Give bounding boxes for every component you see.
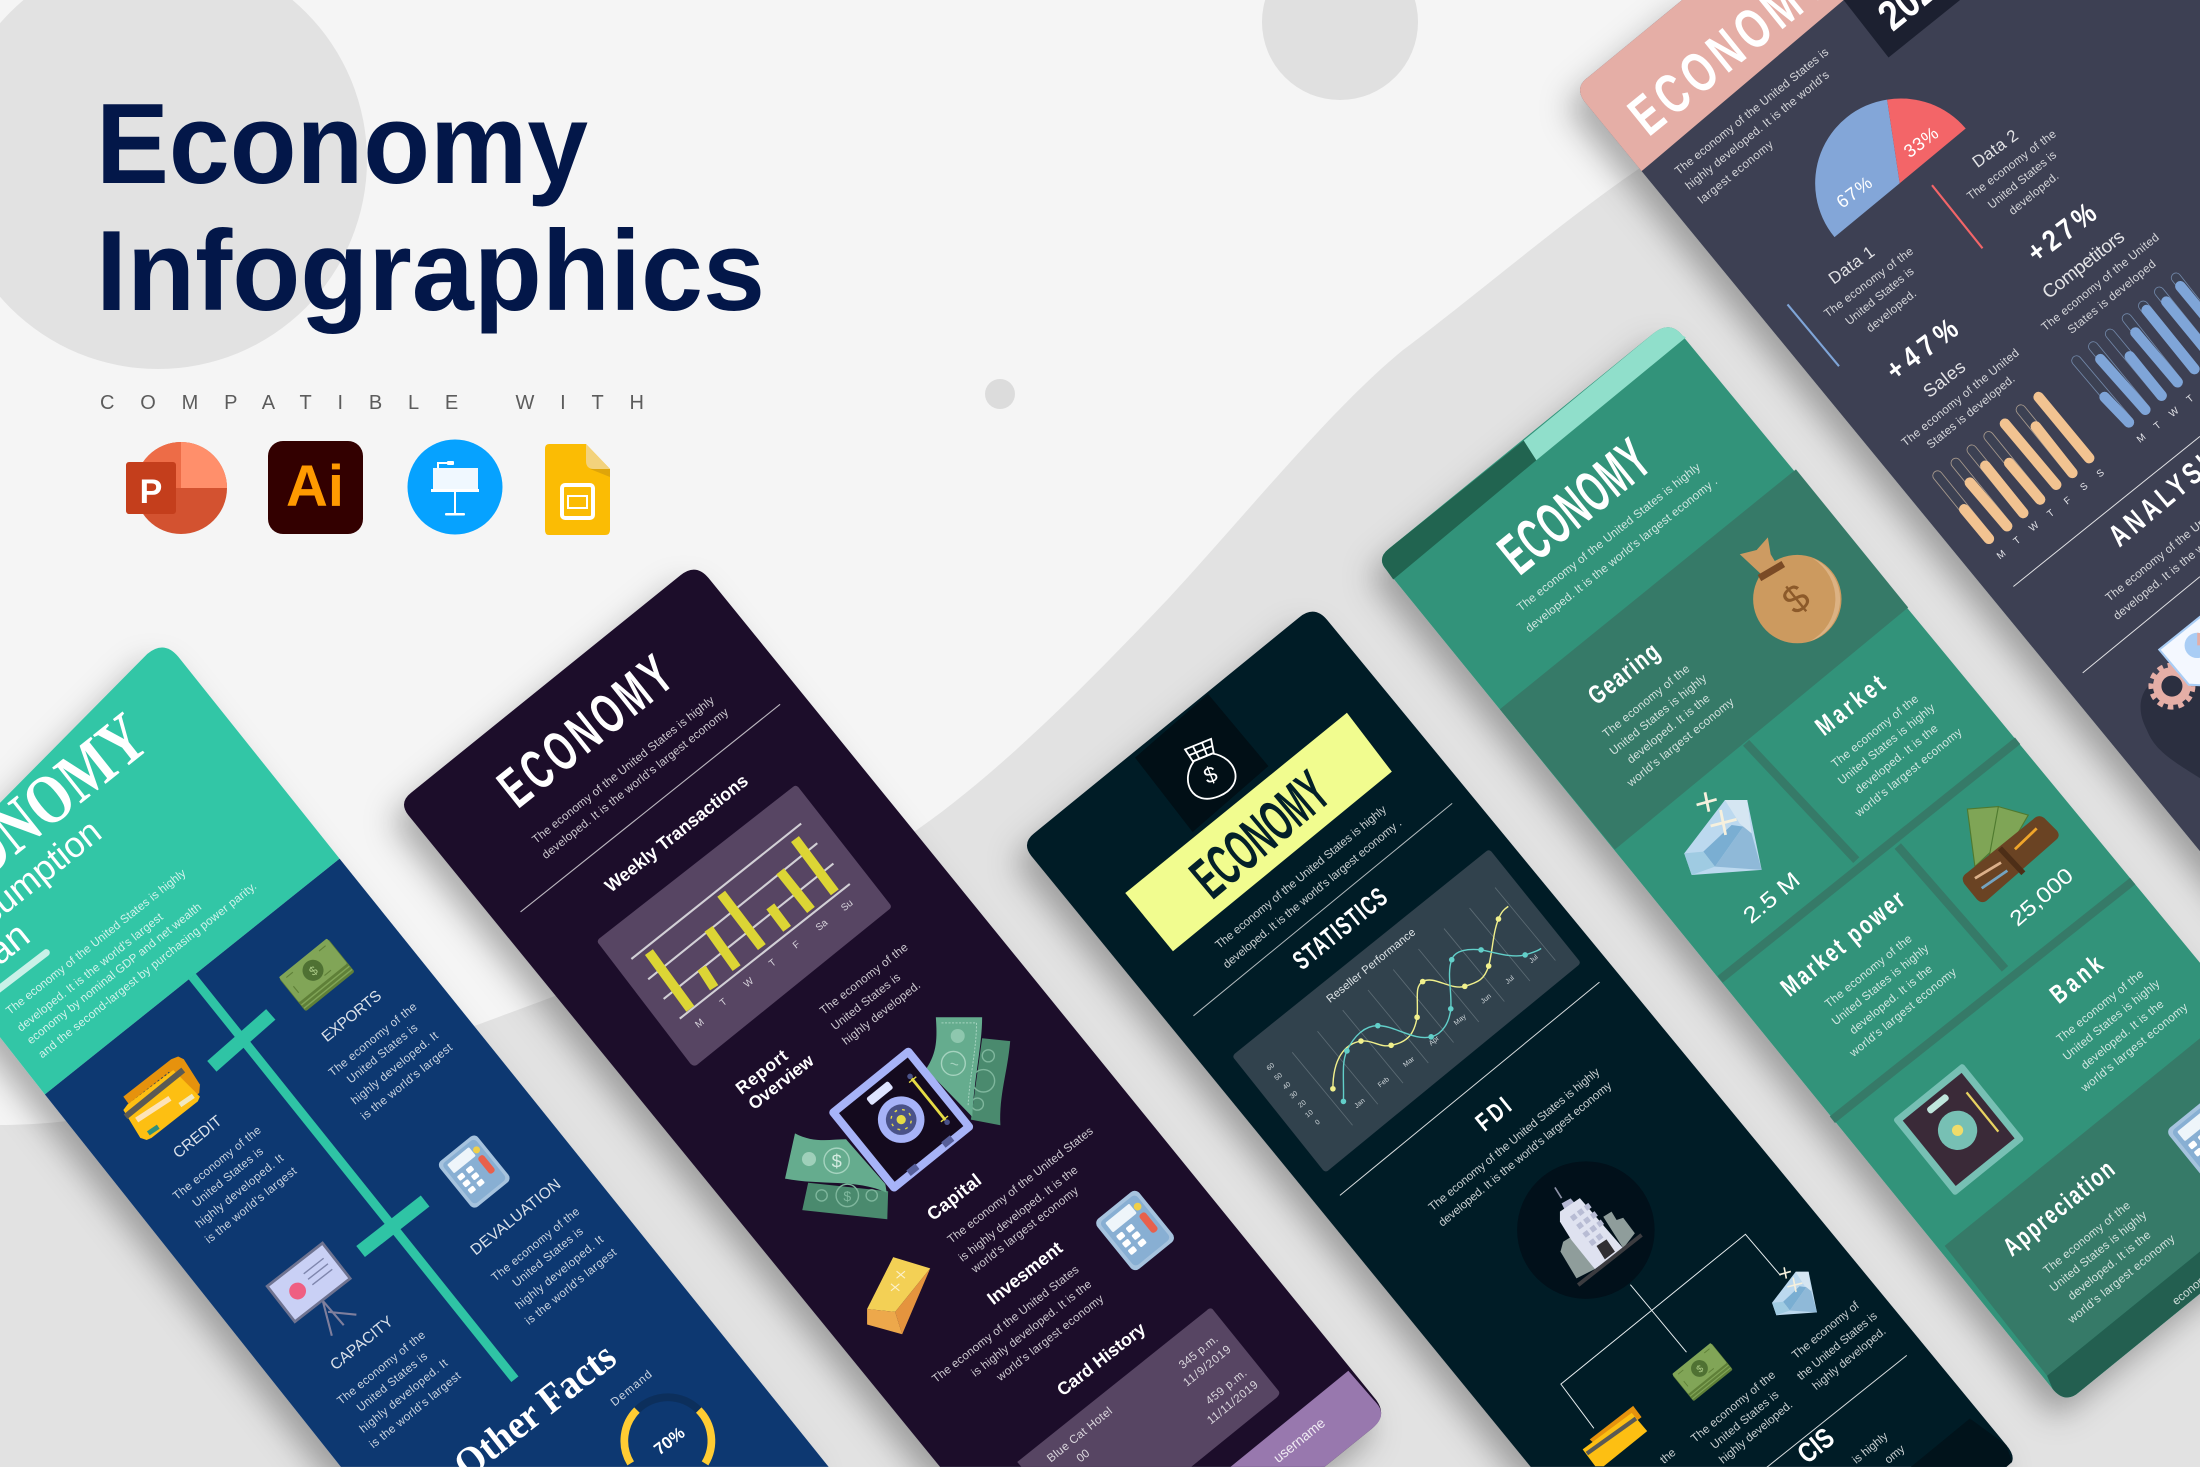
panel: card history table: Blue Cat Hotel — [1045, 1405, 1115, 1465]
analysis text clipped: omy — [1882, 1442, 1908, 1466]
intro text: The economy of the United States is highly — [1515, 461, 1703, 614]
icon: building — [1517, 1161, 1655, 1299]
heading: ECONOMY — [1178, 758, 1342, 910]
item: capacity — [327, 1313, 464, 1451]
report overview text: The economy of the — [817, 941, 911, 1017]
heading: FDI: FDI — [1470, 1092, 1517, 1137]
item: bank: world's largest economy — [2078, 1001, 2191, 1095]
icon: bank notes right: ~ — [948, 1056, 960, 1074]
card body — [1382, 327, 2200, 1398]
icon: money bag — [1740, 537, 1842, 643]
item: capital — [923, 1124, 1096, 1276]
item: appreciation: Appreciation — [1998, 1155, 2120, 1262]
stat: competitors: The economy of the United — [2039, 231, 2162, 334]
bar chart: orange pill bars: T — [2012, 535, 2023, 547]
donut chart: 70 percent: 70% — [650, 1423, 688, 1459]
item: exports: United States is — [344, 1021, 420, 1086]
item: market power: developed. It is the — [1847, 963, 1935, 1037]
line chart: reseller performance: Jun — [1480, 993, 1493, 1005]
item: data 1: Data 1 — [1825, 242, 1878, 288]
card footer — [1230, 1371, 1381, 1467]
item: bank — [2044, 949, 2191, 1095]
item: bank: United States is highly — [2060, 977, 2163, 1063]
bar chart: weekly transactions: Su — [839, 898, 855, 914]
bar chart: orange pill bars: W — [2027, 519, 2042, 534]
panel: dark statistics card — [1027, 612, 2013, 1467]
icon: gold bar — [867, 1257, 930, 1334]
intro text: highly developed. It is the world's — [1683, 68, 1832, 192]
icon: wallet — [1963, 807, 2059, 902]
item: devaluation — [467, 1176, 620, 1328]
item: credit: CREDIT — [170, 1112, 226, 1162]
item: capital: The economy of the United States — [945, 1124, 1096, 1246]
section: appreciation background — [1945, 1002, 2200, 1376]
pie chart: 33% — [1899, 122, 1942, 162]
line chart: reseller performance: Jul — [1528, 954, 1540, 965]
stat: sales: +47% — [1879, 311, 1964, 387]
item: gearing: world's largest economy — [1624, 695, 1737, 790]
bar chart: blue pill bars — [2077, 278, 2200, 445]
line chart: reseller performance: Mar — [1402, 1055, 1417, 1069]
icon: Keynote — [408, 440, 502, 534]
intro text: and the second-largest by purchasing power parity. — [36, 880, 259, 1061]
intro text: The economy of the United States is highly — [4, 867, 189, 1017]
card footer — [2047, 1215, 2200, 1398]
report overview text: United States is — [829, 971, 903, 1033]
item: data 1: The economy of the — [1822, 245, 1916, 320]
item: appreciation: world's largest economy — [2065, 1232, 2178, 1327]
decorative circle: top — [1262, 0, 1418, 100]
bar chart: weekly transactions: F — [791, 939, 803, 951]
icon: money bag outline — [1176, 735, 1241, 805]
footer username: username — [1270, 1414, 1328, 1466]
item: exports: The economy of the — [326, 1000, 419, 1079]
icon: diamond — [1684, 792, 1762, 875]
item: appreciation — [1998, 1155, 2178, 1327]
item: exports: highly developed. It — [349, 1029, 441, 1107]
icon: credit card — [1583, 1406, 1647, 1466]
report overview heading: Report — [732, 1045, 792, 1098]
pie chart: 67% — [1832, 172, 1876, 212]
intro text: The economy of the United States is highly — [1213, 803, 1389, 951]
compatible software icons — [126, 440, 610, 535]
item: capacity: is the world's largest — [367, 1369, 464, 1451]
panel: card history table: 11/11/2019 — [1205, 1378, 1261, 1427]
intro text: The economy of the United States is — [1672, 46, 1831, 178]
title banner — [1125, 713, 1392, 951]
icon: bank notes left: $ — [832, 1150, 842, 1171]
intro text: developed. It is the world's largest economy . — [1221, 817, 1404, 971]
item: devaluation: highly developed. It — [513, 1233, 607, 1312]
org tree lines — [1561, 1234, 1780, 1428]
stat: competitors — [2020, 196, 2162, 337]
item: gearing — [1582, 636, 1737, 790]
label: demand: Demand — [608, 1368, 655, 1409]
bar chart: weekly transactions: W — [742, 975, 757, 990]
stat: 25,000: 25,000 — [2004, 863, 2078, 931]
line chart: reseller performance: Feb — [1377, 1076, 1391, 1089]
decorative circle: large — [0, 0, 367, 369]
item: exports — [319, 987, 456, 1123]
panel: slate analysis card — [1580, 0, 2200, 940]
item: gearing: developed. It is the — [1625, 692, 1713, 766]
item: market — [1809, 668, 1965, 820]
bar chart: weekly transactions: T — [718, 996, 730, 1009]
item: exports: EXPORTS — [319, 987, 385, 1046]
analysis text clipped: is highly — [1850, 1430, 1891, 1466]
line chart: reseller performance: Jan — [1353, 1097, 1367, 1110]
item: market: United States is highly — [1836, 701, 1938, 787]
icon: PowerPoint — [126, 442, 227, 534]
icon: PowerPoint: P — [140, 473, 162, 511]
card body — [404, 570, 1381, 1467]
stat: competitors: +27% — [2020, 196, 2102, 269]
item: bank: Bank — [2044, 949, 2108, 1009]
item: market power: The economy of the — [1822, 932, 1915, 1010]
item: market power: United States is highly — [1829, 942, 1931, 1028]
bar chart: orange pill bars: S — [2095, 467, 2107, 480]
underline — [0, 953, 46, 999]
panel: card history table — [1017, 1308, 1279, 1467]
timeline — [192, 977, 515, 1379]
item: data 2: developed. — [2006, 170, 2061, 218]
icon: safe — [828, 1046, 975, 1193]
item: market: Market — [1809, 668, 1891, 741]
item: capacity: The economy of the — [335, 1329, 428, 1407]
title: Economy — [96, 81, 588, 208]
bar chart: weekly transactions — [598, 786, 891, 1066]
icon: money — [1672, 1343, 1733, 1401]
bar chart: weekly transactions: T — [767, 957, 779, 970]
line chart: reseller performance: 20 — [1297, 1099, 1308, 1110]
item text: diamond: highly developed. — [1810, 1325, 1889, 1393]
item: investment: world's largest economy — [993, 1292, 1106, 1384]
bar chart: blue pill bars: T — [2152, 420, 2164, 432]
panel: card history table: 11/9/2019 — [1181, 1343, 1234, 1389]
stat: competitors: States is developed — [2065, 258, 2158, 337]
item: devaluation: is the world's largest — [523, 1245, 620, 1328]
pie chart — [1815, 98, 1966, 237]
icon: calculator — [437, 1133, 512, 1210]
item text: diamond — [1790, 1299, 1889, 1393]
item: market: The economy of the — [1829, 692, 1921, 771]
heading: ECONOMY — [486, 643, 684, 819]
stat: sales — [1879, 311, 2022, 451]
panel: card history table: 00 — [1074, 1446, 1093, 1465]
icon: credit card — [123, 1057, 200, 1140]
item: capacity: CAPACITY — [327, 1313, 397, 1374]
top band dark — [1382, 441, 1536, 579]
bar chart: blue pill bars: W — [2167, 405, 2182, 420]
item: capacity: highly developed. It — [357, 1356, 451, 1436]
FDI text: developed. It is the world's largest economy — [1436, 1079, 1614, 1229]
line chart: reseller performance: 60 — [1266, 1062, 1276, 1072]
item: data 2: The economy of the — [1965, 127, 2059, 203]
item: bank: The economy of the — [2054, 967, 2146, 1046]
item: bank: developed. It is the — [2079, 998, 2166, 1072]
stat: sales: Sales — [1919, 356, 1969, 402]
title: Infographics — [96, 208, 765, 335]
icon: Illustrator: Ai — [286, 454, 344, 519]
card footer strip — [1911, 1418, 2012, 1467]
item: investment: is highly developed. It is the — [969, 1278, 1094, 1379]
line chart: reseller performance: 50 — [1273, 1072, 1284, 1082]
icon: bank notes left: $ — [843, 1188, 851, 1204]
line chart: reseller performance — [1233, 850, 1580, 1172]
bar chart: orange pill bars — [1938, 397, 2107, 562]
item: gearing: United States is highly — [1607, 672, 1709, 758]
item: data 2: Data 2 — [1969, 126, 2022, 172]
card shell — [0, 647, 829, 1467]
FDI text: The economy of the United States is highly — [1426, 1065, 1602, 1214]
stat: competitors: Competitors — [2039, 226, 2129, 303]
line chart: reseller performance: 40 — [1282, 1081, 1292, 1091]
item: investment: Invesment — [983, 1237, 1066, 1309]
item: gearing: Gearing — [1582, 636, 1665, 710]
item: data 1: developed. — [1864, 287, 1919, 335]
icon: calculator — [1094, 1188, 1176, 1273]
item: capital: world's largest economy — [968, 1184, 1081, 1276]
item: devaluation: United States is — [510, 1225, 586, 1290]
bar chart: orange pill bars: M — [1995, 548, 2008, 562]
item text: card: the — [1658, 1446, 1678, 1466]
decorative circle: small — [985, 379, 1015, 409]
panel: green economy card — [1382, 327, 2200, 1398]
item: appreciation: The economy of the — [2041, 1199, 2133, 1277]
item: market: developed. It is the — [1853, 722, 1941, 796]
icon: safe — [1893, 1063, 2024, 1196]
item: capital: is highly developed. It is the — [956, 1163, 1080, 1264]
icon: bank notes right — [926, 1017, 1010, 1125]
heading: card history: Card History — [1053, 1318, 1149, 1400]
line chart: reseller performance: 0 — [1314, 1119, 1322, 1127]
item: credit: highly developed. It — [193, 1151, 287, 1231]
item: devaluation: DEVALUATION — [467, 1176, 564, 1259]
item: gearing: The economy of the — [1600, 662, 1692, 740]
panel: card history table: 345 p.m. — [1176, 1332, 1221, 1372]
icon: Google Slides — [545, 444, 610, 535]
item: devaluation: The economy of the — [489, 1205, 582, 1284]
line chart: reseller performance: 10 — [1304, 1109, 1315, 1119]
bar chart: orange pill bars: F — [2062, 495, 2074, 507]
panel: teal and blue consumption card — [0, 647, 829, 1467]
line chart: reseller performance: 30 — [1289, 1090, 1299, 1100]
item: market power — [1775, 884, 1959, 1060]
icon: money bag outline: $ — [1200, 761, 1221, 789]
item: credit: United States is — [190, 1145, 266, 1210]
indicator line: data 1 — [1787, 304, 1839, 366]
report overview text — [817, 941, 923, 1048]
bar chart: orange pill bars: S — [2078, 481, 2091, 493]
icon tab — [1135, 694, 1268, 832]
icon: money — [278, 938, 355, 1011]
heading: ECONOMY — [1487, 427, 1663, 587]
intro text: developed. It is the world's largest — [15, 910, 166, 1034]
intro text: economy by nominal GDP and net wealth — [25, 900, 204, 1047]
icon: Illustrator — [268, 441, 363, 534]
item text: money: United States is — [1708, 1388, 1782, 1452]
donut chart: 70 percent — [624, 1397, 711, 1463]
item: market power: world's largest economy — [1846, 965, 1959, 1060]
item text: diamond: the United States is — [1795, 1309, 1880, 1383]
icon: presentation board — [267, 1243, 356, 1336]
heading: statistics: STATISTICS — [1287, 882, 1393, 976]
intro text: developed. It is the world's largest economy . — [1523, 475, 1720, 635]
item: investment: The economy of the United States — [930, 1263, 1082, 1386]
bar chart: weekly transactions: Sa — [814, 917, 831, 934]
bar chart: blue pill bars: M — [2135, 432, 2148, 445]
item: credit: The economy of the — [170, 1124, 264, 1203]
title — [96, 81, 765, 335]
item: data 2: United States is — [1985, 148, 2059, 212]
item: market: world's largest economy — [1852, 726, 1965, 820]
icon: diamond — [1772, 1267, 1817, 1315]
line chart: reseller performance: May — [1453, 1013, 1468, 1027]
grid gaps — [1720, 741, 2133, 1120]
intro text: largest economy — [1696, 138, 1776, 206]
intro text: The economy of the United States is highly — [530, 694, 717, 846]
bar chart: blue pill bars: T — [2185, 393, 2196, 405]
item text: money — [1689, 1368, 1795, 1466]
item: credit — [170, 1112, 300, 1246]
chart title: Weekly Transactions — [600, 770, 752, 896]
stat: sales: States is developed. — [1924, 372, 2018, 451]
panel: card history table: 459 p.m. — [1203, 1366, 1249, 1407]
stat: 2.5 M: 2.5 M — [1738, 867, 1805, 928]
item: exports: is the world's largest — [359, 1041, 456, 1123]
item: data 1: United States is — [1843, 265, 1917, 328]
item text: money: highly developed. — [1717, 1398, 1795, 1466]
panel: purple report card — [404, 570, 1381, 1467]
year tab — [1844, 0, 1960, 58]
stat: sales: The economy of the United — [1899, 346, 2022, 449]
item: appreciation: United States is highly — [2047, 1208, 2149, 1295]
report overview text: highly developed. — [840, 979, 923, 1048]
illustration: blob, gear and screen — [2141, 603, 2200, 807]
item text: money: The economy of the — [1689, 1368, 1778, 1445]
icon: money bag: $ — [1774, 575, 1819, 623]
card body — [1580, 0, 2200, 940]
top band light — [1524, 327, 1686, 460]
bar chart: orange pill bars: T — [2045, 508, 2057, 520]
card header — [1580, 0, 1852, 171]
line chart: reseller performance: Apr — [1428, 1035, 1441, 1047]
line chart: reseller performance: Reseller Performance — [1324, 926, 1418, 1006]
card body — [1027, 612, 2013, 1467]
icon: bank notes left — [785, 1133, 888, 1219]
section: gearing background — [1500, 469, 1908, 850]
item: capacity: United States is — [354, 1350, 430, 1415]
item: credit: is the world's largest — [203, 1164, 300, 1246]
line chart: reseller performance: Jul — [1504, 974, 1516, 986]
item text: diamond: The economy of — [1790, 1299, 1862, 1362]
compatible with label: COMPATIBLE WITH — [100, 392, 644, 414]
analysis text — [2103, 450, 2200, 623]
item: market power: Market power — [1775, 884, 1910, 1002]
icon: calculator clipped — [2166, 1097, 2200, 1181]
intro text: developed. It is the world's largest economy — [540, 706, 731, 862]
report overview heading: Overview — [744, 1050, 818, 1114]
indicator line: data 2 — [1932, 185, 1983, 248]
item: appreciation: developed. It is the — [2066, 1228, 2153, 1303]
item: capital: Capital — [923, 1169, 985, 1225]
bar chart: weekly transactions: M — [693, 1017, 707, 1031]
